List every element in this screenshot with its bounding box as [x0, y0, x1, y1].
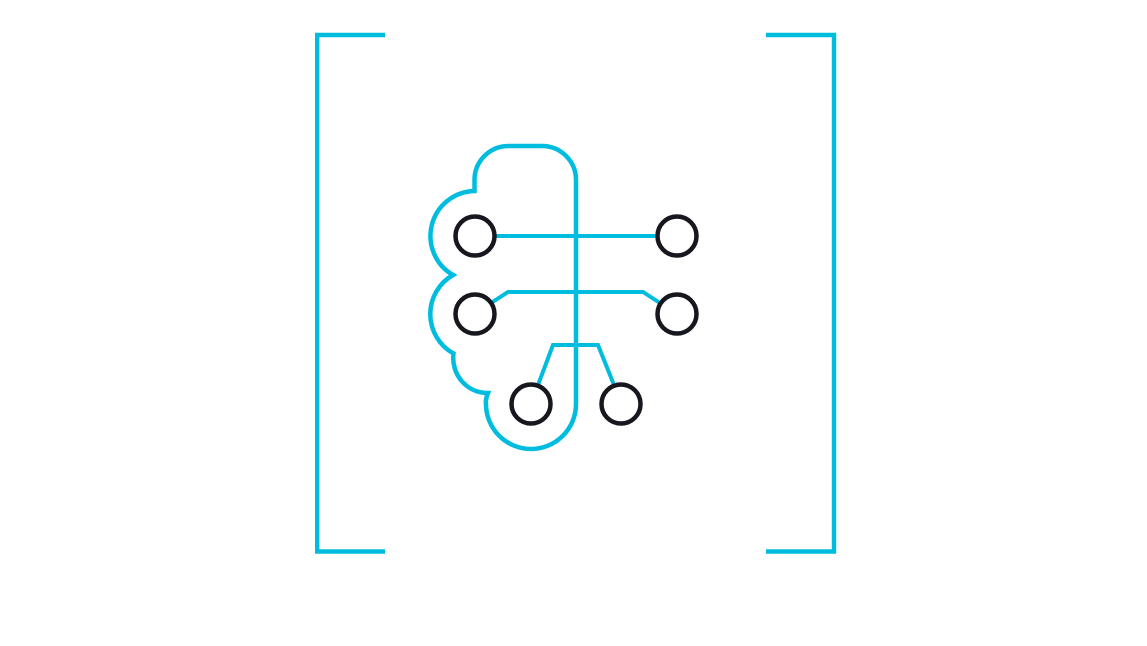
network nodes [456, 216, 696, 424]
left bracket [317, 35, 385, 552]
icon: brain outline [430, 146, 576, 449]
connector lines [491, 236, 660, 385]
right bracket [766, 35, 834, 552]
